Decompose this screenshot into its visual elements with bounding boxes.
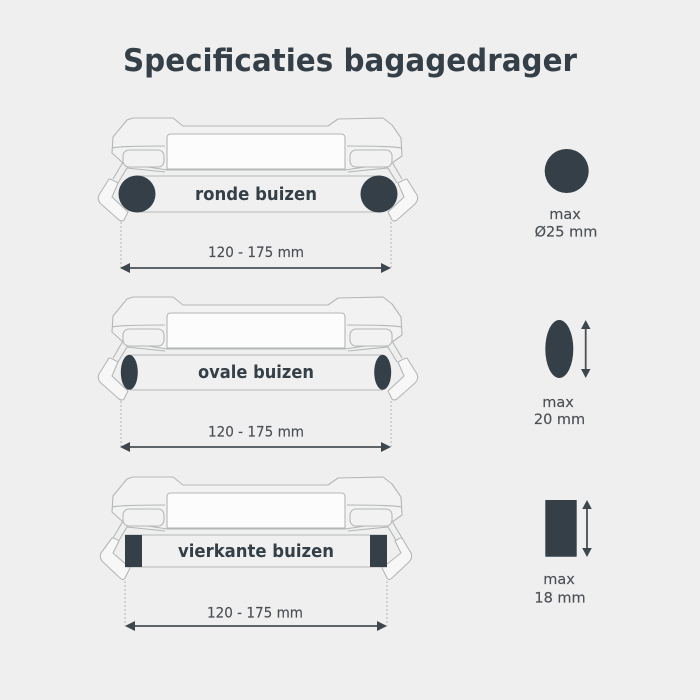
dimension text: 120 - 175 mm [207,606,303,622]
panel: ronde buizen [98,118,418,273]
clamp right [382,538,412,580]
icon: oval tube size [545,320,573,378]
clamp right [388,358,418,400]
dimension text: 120 - 175 mm [208,245,304,261]
tube [130,355,383,390]
title: Specificaties bagagedrager [123,43,577,79]
tube [137,176,380,212]
text: oval tube max: 20 mm [534,412,585,428]
text: square tube max: 18 mm [534,590,586,606]
text: oval tube max: max [542,395,574,411]
tube label: ronde buizen [195,185,317,205]
icon: round tube size [545,149,589,193]
clamp right [388,179,418,221]
rack illustration [112,118,402,183]
text: square tube max: max [543,572,575,588]
panel: ovale buizen [98,297,418,452]
dimension lines [121,222,391,268]
dimension lines [125,581,387,626]
arrow: oval height [581,320,590,378]
clamp left [100,538,130,580]
dimension lines [121,401,391,447]
dimension text: 120 - 175 mm [208,424,304,440]
text: round tube max: Ø25 mm [535,224,597,240]
text: round tube max: max [549,207,581,223]
square tube sections [125,535,387,567]
arrow: square height [582,500,592,557]
rack illustration [112,477,402,542]
clamp left [98,358,128,400]
dimension arrow [120,263,391,273]
panel: vierkante buizen [100,477,412,631]
clamp left [98,179,128,221]
dimension arrow [125,621,387,631]
tube label: ovale buizen [198,363,314,383]
icon: square tube size [545,500,577,557]
oval tube sections [121,355,391,390]
tube label: vierkante buizen [178,542,334,562]
tube [125,535,387,567]
rack illustration [112,297,402,362]
dimension arrow [120,442,391,452]
round tube sections [118,176,398,212]
